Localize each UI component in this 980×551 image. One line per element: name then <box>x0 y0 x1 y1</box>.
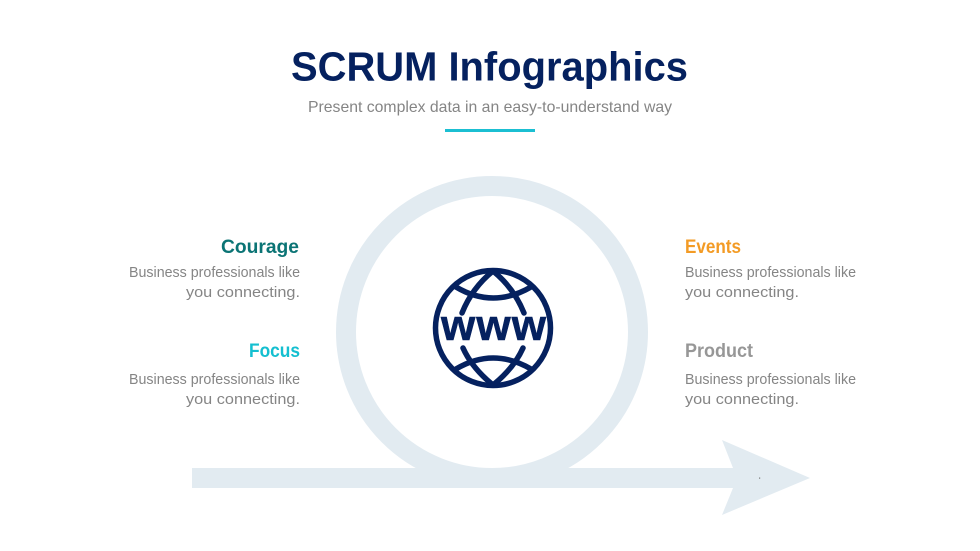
block: events <box>685 237 856 301</box>
block: focus: Business professionals like <box>129 371 300 388</box>
block: product: you connecting. <box>685 391 799 408</box>
block: product: Product <box>685 341 754 362</box>
block: product: Business professionals like <box>685 371 856 388</box>
block: events: you connecting. <box>685 284 799 301</box>
arrow loop ring <box>346 186 638 478</box>
arrow speck <box>759 478 760 479</box>
block: courage: Courage <box>221 237 299 258</box>
title: SCRUM Infographics <box>291 44 688 90</box>
block: product <box>685 341 856 408</box>
icon: www globe <box>436 270 550 386</box>
block: events: Events <box>685 237 741 258</box>
block: events: Business professionals like <box>685 264 856 281</box>
subtitle: Present complex data in an easy-to-understand way <box>308 99 672 116</box>
block: courage <box>129 237 300 301</box>
block: focus <box>129 341 300 408</box>
block: focus: Focus <box>249 341 300 362</box>
arrow shaft and head <box>192 440 810 515</box>
loop arrow <box>192 186 810 515</box>
block: focus: you connecting. <box>186 391 300 408</box>
icon: www globe: www <box>440 301 547 350</box>
block: courage: you connecting. <box>186 284 300 301</box>
title underline <box>445 129 535 132</box>
block: courage: Business professionals like <box>129 264 300 281</box>
